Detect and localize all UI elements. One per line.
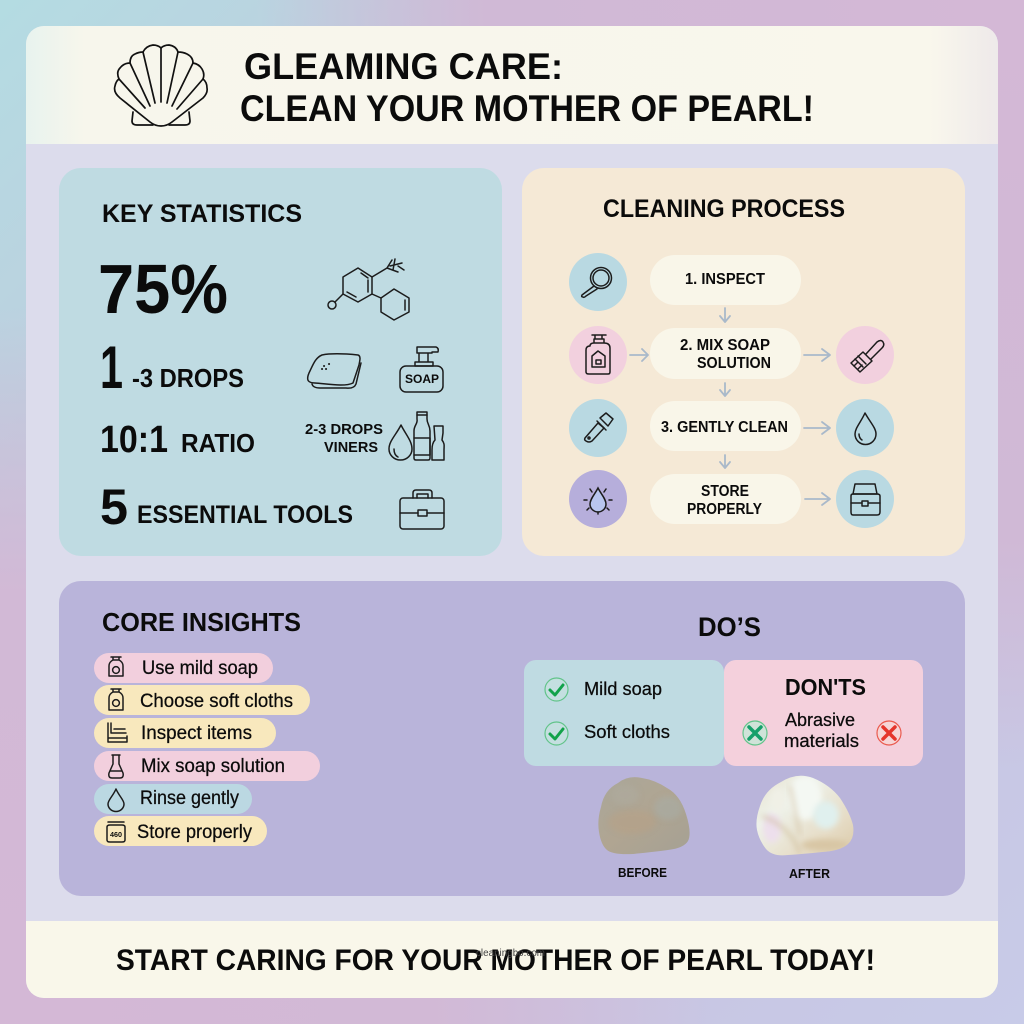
insight: use mild soap: Use mild soap xyxy=(142,658,258,679)
step 4 pill: PROPERLY xyxy=(687,501,763,518)
insight: rinse gently xyxy=(94,784,252,814)
panel: core insights xyxy=(59,581,965,896)
image: stone before xyxy=(598,777,690,877)
icon: drop and bottles xyxy=(389,412,444,460)
insight: choose soft cloths xyxy=(94,685,310,715)
icon: check xyxy=(545,722,568,745)
step 1 pill xyxy=(650,255,801,305)
stat: 5 essential tools: ESSENTIAL TOOLS xyxy=(137,501,353,529)
footer band xyxy=(26,921,998,998)
panel: do's list xyxy=(524,660,724,766)
panel: don'ts: Abrasive xyxy=(785,710,855,730)
panel: do's list: Soft cloths xyxy=(584,721,670,742)
icon: molecule xyxy=(328,259,409,320)
icon: soap bottle pink xyxy=(569,326,627,384)
panel: don'ts xyxy=(724,660,923,766)
icon: brush xyxy=(836,326,894,384)
step 3 pill xyxy=(650,401,801,451)
panel: key statistics xyxy=(59,168,502,556)
icon: magnifier xyxy=(569,253,627,311)
label: before: BEFORE xyxy=(618,866,667,880)
insight: store properly: Store properly xyxy=(137,822,252,843)
icon: toolbox xyxy=(400,490,444,529)
icon: check xyxy=(545,678,568,701)
image: stone after xyxy=(756,776,854,878)
header band xyxy=(26,26,998,144)
insight: store properly xyxy=(94,816,267,846)
step 3 pill: 3. GENTLY CLEAN xyxy=(661,419,788,436)
insight: choose soft cloths: Choose soft cloths xyxy=(140,691,293,712)
panel: don'ts: DON'TS xyxy=(785,674,866,700)
insight: mix soap solution: Mix soap solution xyxy=(141,756,285,777)
stat: 10:1 ratio: RATIO xyxy=(181,428,255,458)
title: CLEAN YOUR MOTHER OF PEARL! xyxy=(240,88,814,129)
watermark: cleaningbo.com xyxy=(476,948,545,959)
insight: rinse gently: Rinse gently xyxy=(140,788,239,809)
icon: cloth xyxy=(308,354,361,388)
label: after: AFTER xyxy=(789,867,830,881)
step 1 pill: 1. INSPECT xyxy=(685,271,765,288)
heading: cleaning process: CLEANING PROCESS xyxy=(603,195,845,223)
stat: 1-3 drops xyxy=(100,334,244,401)
title xyxy=(240,46,814,129)
icon: sparkling drop xyxy=(569,470,627,528)
insight: inspect items xyxy=(94,718,276,748)
step 4 pill xyxy=(650,474,801,524)
stat: 5 essential tools xyxy=(100,479,353,535)
icon: soap bottle xyxy=(400,347,443,392)
icon: soap bottle: SOAP xyxy=(405,372,439,386)
heading: key statistics: KEY STATISTICS xyxy=(102,200,302,228)
icon: seashell xyxy=(115,45,207,126)
heading: do's: DO’S xyxy=(698,612,761,642)
icon: water drop xyxy=(836,399,894,457)
stat: 1-3 drops: -3 DROPS xyxy=(132,363,244,393)
icon: green cross xyxy=(743,721,767,745)
stat: 1-3 drops: 1 xyxy=(100,334,123,401)
note: 2-3 drops viners: VINERS xyxy=(324,440,378,456)
step 4 pill: STORE xyxy=(701,483,749,500)
process arrows xyxy=(630,308,830,505)
icon: red cross xyxy=(877,721,901,745)
insight: store properly: 460 xyxy=(110,832,122,839)
step 2 pill xyxy=(650,328,801,379)
insight: inspect items: Inspect items xyxy=(141,723,252,744)
note: 2-3 drops viners xyxy=(305,422,383,456)
icon: storage case xyxy=(836,470,894,528)
icon: scraper xyxy=(569,399,627,457)
panel: cleaning process xyxy=(522,168,965,556)
call to action: START CARING FOR YOUR MOTHER OF PEARL TODAY! xyxy=(116,944,875,977)
insight: mix soap solution xyxy=(94,751,320,781)
title: GLEAMING CARE: xyxy=(244,46,563,87)
note: 2-3 drops viners: 2-3 DROPS xyxy=(305,422,383,438)
step 2 pill: SOLUTION xyxy=(697,355,771,372)
step 2 pill: 2. MIX SOAP xyxy=(680,337,770,354)
insight: use mild soap xyxy=(94,653,273,683)
panel: do's list: Mild soap xyxy=(584,678,662,699)
stat: 5 essential tools: 5 xyxy=(100,479,128,535)
panel: don'ts: materials xyxy=(784,731,859,751)
stat: 75%: 75% xyxy=(98,250,228,328)
heading: core insights: CORE INSIGHTS xyxy=(102,607,301,637)
stat: 10:1 ratio: 10:1 xyxy=(100,419,168,461)
stat: 10:1 ratio xyxy=(100,419,255,461)
